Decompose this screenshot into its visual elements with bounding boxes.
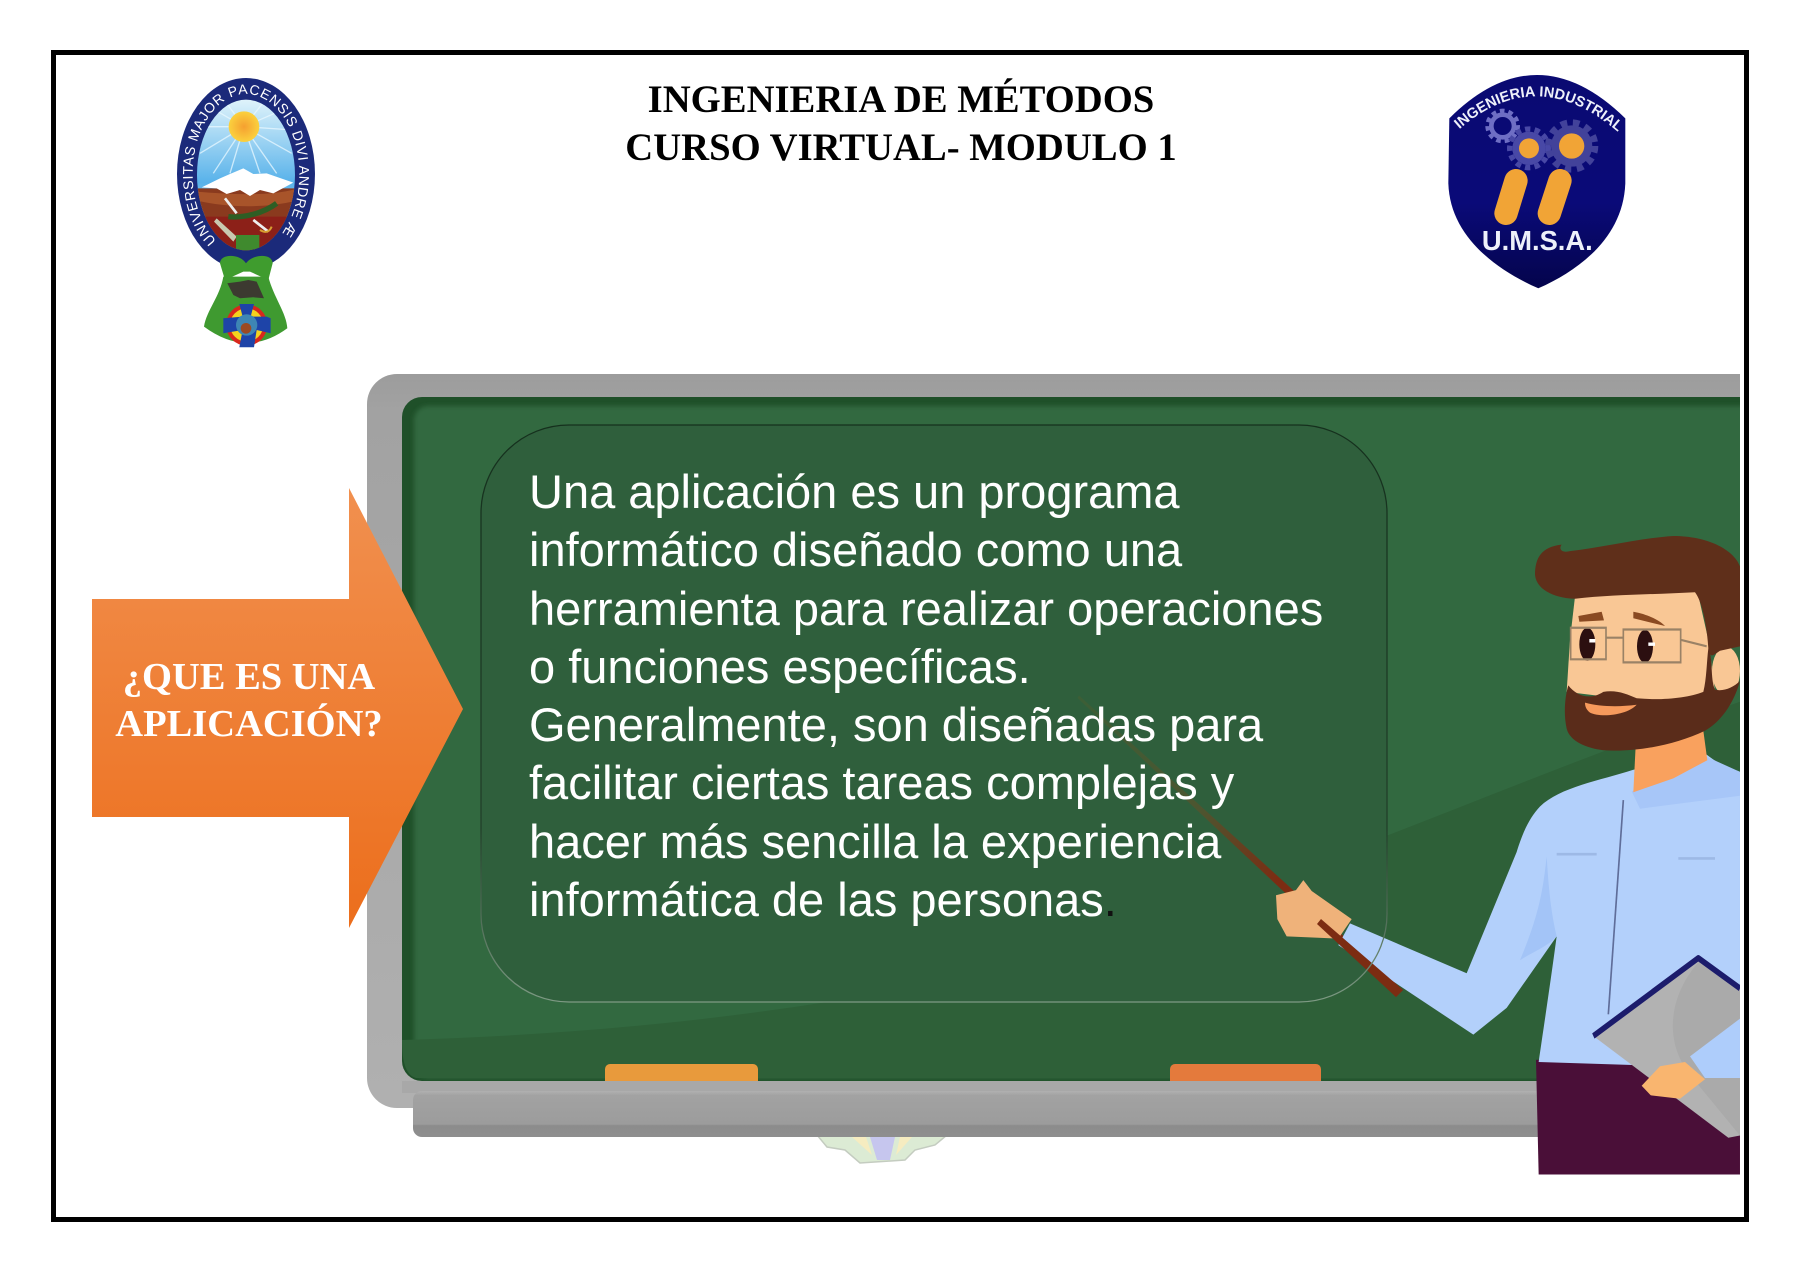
logo: Ingenieria Industrial shield [1448,75,1626,288]
definition text: hacer más sencilla la experiencia [529,815,1221,868]
callout question: APLICACIÓN? [115,703,383,745]
chalk: red-orange [1170,1064,1321,1081]
board frame [367,374,1787,1108]
crest lettering: UNIVERSITAS MAJOR PACENSIS DIVI ANDRE Æ [183,84,309,246]
eyes [1579,628,1595,661]
definition text: informático diseñado como una [529,523,1182,576]
eyebrows [1578,612,1665,626]
glasses [1571,628,1707,662]
panel outline [481,425,1387,1002]
tablet shade [1673,962,1740,1136]
illustration layer [92,75,1740,1174]
pointer stick end [1317,919,1403,997]
chalk tray [413,1094,1538,1137]
definition text: facilitar ciertas tareas complejas y [529,756,1234,809]
pointing hand [1276,880,1352,939]
sleeve over tablet [1690,1019,1740,1078]
definition text: Una aplicación es un programa [529,465,1180,518]
board lower shade [402,700,1745,1078]
definition text: Generalmente, son diseñadas para [529,698,1263,751]
neck [1633,731,1707,792]
callout question [115,656,383,745]
text panel fill [481,425,1387,1002]
callout arrow [92,488,463,928]
holding hand [1642,1062,1705,1099]
title: CURSO VIRTUAL- MODULO 1 [625,126,1177,168]
callout question: ¿QUE ES UNA [123,656,375,698]
teacher figure [1276,536,1740,1175]
hair [1535,536,1740,655]
face [1567,588,1715,705]
board ledge [605,1081,1321,1088]
definition text: herramienta para realizar operaciones [529,582,1323,635]
beard [1565,649,1740,751]
tablet [1593,958,1740,1138]
title [625,78,1177,168]
shield arc title: INGENIERIA INDUSTRIAL [1454,86,1620,132]
shield U.M.S.A. label: U.M.S.A. [1482,225,1593,256]
definition text: informática de las personas. [529,873,1117,926]
chalkboard [367,374,1793,1163]
emblem below tray [817,1135,947,1163]
definition text [529,465,1323,926]
ear [1712,648,1740,690]
green writing surface [402,397,1782,1081]
title: INGENIERIA DE MÉTODOS [648,78,1154,120]
trousers [1536,1060,1740,1175]
mouth [1585,703,1637,715]
logo: Universidad Mayor de San Andres crest [177,78,315,348]
shirt and arm [1338,755,1740,1068]
shirt shading [1520,856,1557,960]
definition text: o funciones específicas. [529,640,1031,693]
tablet navy edges [1593,958,1740,1036]
pointer stick [1078,696,1403,997]
chalk: orange [605,1064,758,1081]
